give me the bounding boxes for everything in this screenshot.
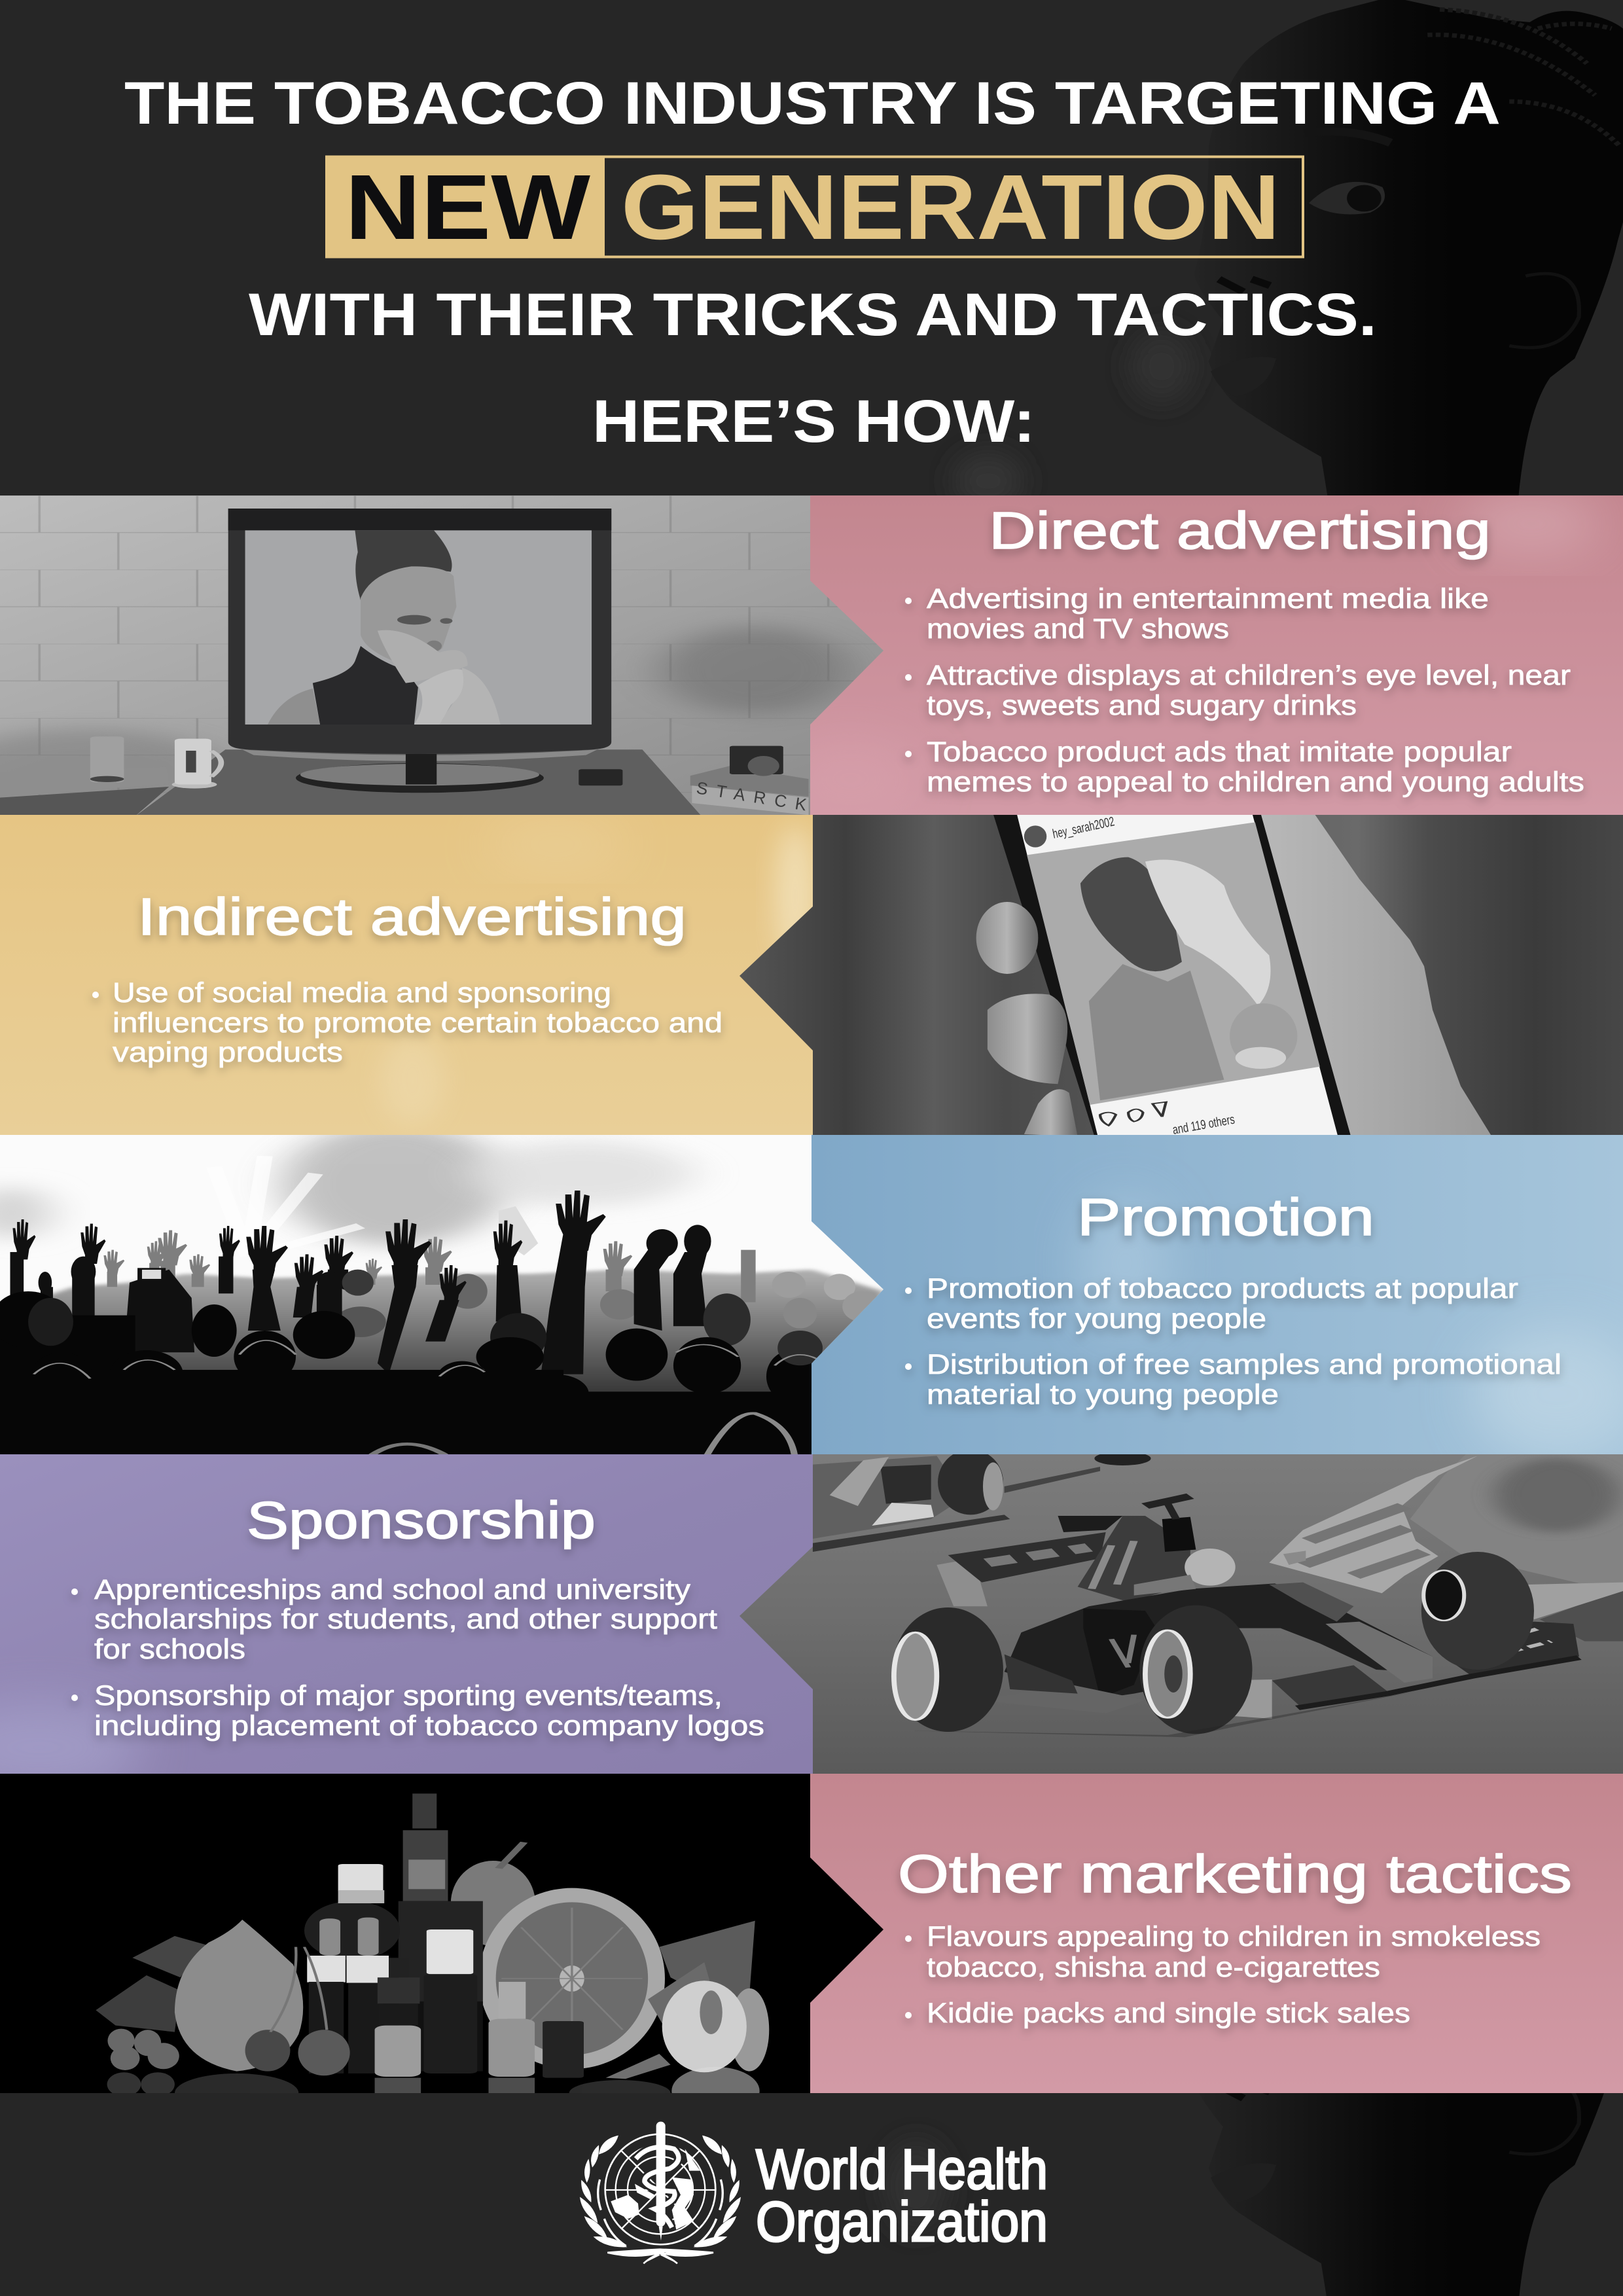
photo: hand holding a phone — [740, 814, 1623, 1138]
bullet list: Tobacco product ads that imitate popular — [927, 736, 1512, 768]
bullet list: Kiddie packs and single stick sales — [927, 1998, 1410, 2029]
photo: hand holding a phone: and 119 others — [1171, 1113, 1236, 1138]
panel: indirect advertising — [0, 814, 1623, 1138]
bullet list: tobacco, shisha and e-cigarettes — [927, 1952, 1380, 1983]
bullet list: Sponsorship of major sporting events/teams, — [94, 1680, 722, 1712]
bullet list: influencers to promote certain tobacco and — [113, 1007, 722, 1039]
background: woman's face, footer — [891, 2093, 1604, 2296]
heading: Direct advertising — [989, 501, 1491, 560]
title line 1: THE TOBACCO INDUSTRY IS TARGETING A — [124, 70, 1501, 137]
photo: concert crowd with raised hands — [0, 1123, 883, 1455]
bullet list: movies and TV shows — [927, 613, 1229, 645]
bullet list: Use of social media and sponsoring — [113, 977, 611, 1009]
bullet list: for schools — [94, 1634, 245, 1665]
World Health Organization logo — [580, 2122, 1048, 2263]
photo: woman smoking on a TV — [0, 495, 883, 816]
heading: Promotion — [1077, 1188, 1374, 1246]
new generation banner: GENERATION — [621, 155, 1280, 259]
bullet list: Attractive displays at children’s eye level, near — [927, 660, 1571, 691]
heading: Sponsorship — [247, 1491, 596, 1549]
bullet list — [905, 1921, 1541, 2029]
bullet list — [92, 977, 722, 1068]
background: woman's face, header — [952, 0, 1623, 511]
new generation banner: NEW — [345, 155, 590, 259]
bullet list: material to young people — [927, 1379, 1279, 1410]
bullet list: memes to appeal to children and young adults — [927, 766, 1584, 798]
title line 3: WITH THEIR TRICKS AND TACTICS. — [249, 281, 1377, 348]
photo: racing car on a track — [740, 1449, 1623, 1774]
icon: WHO emblem — [580, 2122, 741, 2263]
bullet list: Flavours appealing to children in smokeless — [927, 1921, 1541, 1952]
bullet list — [71, 1574, 764, 1742]
bullet list: vaping products — [113, 1037, 343, 1068]
bullet list: events for young people — [927, 1303, 1266, 1335]
bullet list: including placement of tobacco company logos — [94, 1710, 764, 1742]
panel: other marketing tactics — [0, 1774, 1623, 2115]
bullet list: Promotion of tobacco products at popular — [927, 1273, 1518, 1304]
wordmark — [756, 2138, 1048, 2253]
photo: hand holding a phone: hey_sarah2002 — [1051, 814, 1116, 842]
new generation banner — [325, 155, 1303, 259]
bullet list: Apprenticeships and school and university — [94, 1574, 691, 1605]
panel: sponsorship — [0, 1449, 1623, 1793]
title line 4: HERE’S HOW: — [592, 388, 1035, 455]
bullet list: Distribution of free samples and promotional — [927, 1349, 1561, 1380]
panel: direct advertising — [0, 495, 1623, 818]
title — [124, 70, 1501, 455]
wordmark: World Health — [756, 2138, 1048, 2201]
bullet list: toys, sweets and sugary drinks — [927, 690, 1357, 721]
bullet list — [905, 583, 1584, 798]
wordmark: Organization — [756, 2191, 1048, 2253]
panel: promotion — [0, 1123, 1623, 1460]
heading: Indirect advertising — [137, 888, 687, 946]
bullet list: Advertising in entertainment media like — [927, 583, 1489, 615]
heading: Other marketing tactics — [898, 1844, 1572, 1904]
photo: woman smoking on a TV: STARCK — [695, 778, 808, 815]
bullet list: scholarships for students, and other support — [94, 1604, 717, 1635]
bullet list — [905, 1273, 1561, 1410]
photo: fruit and e-cigarette bottles — [0, 1774, 883, 2115]
